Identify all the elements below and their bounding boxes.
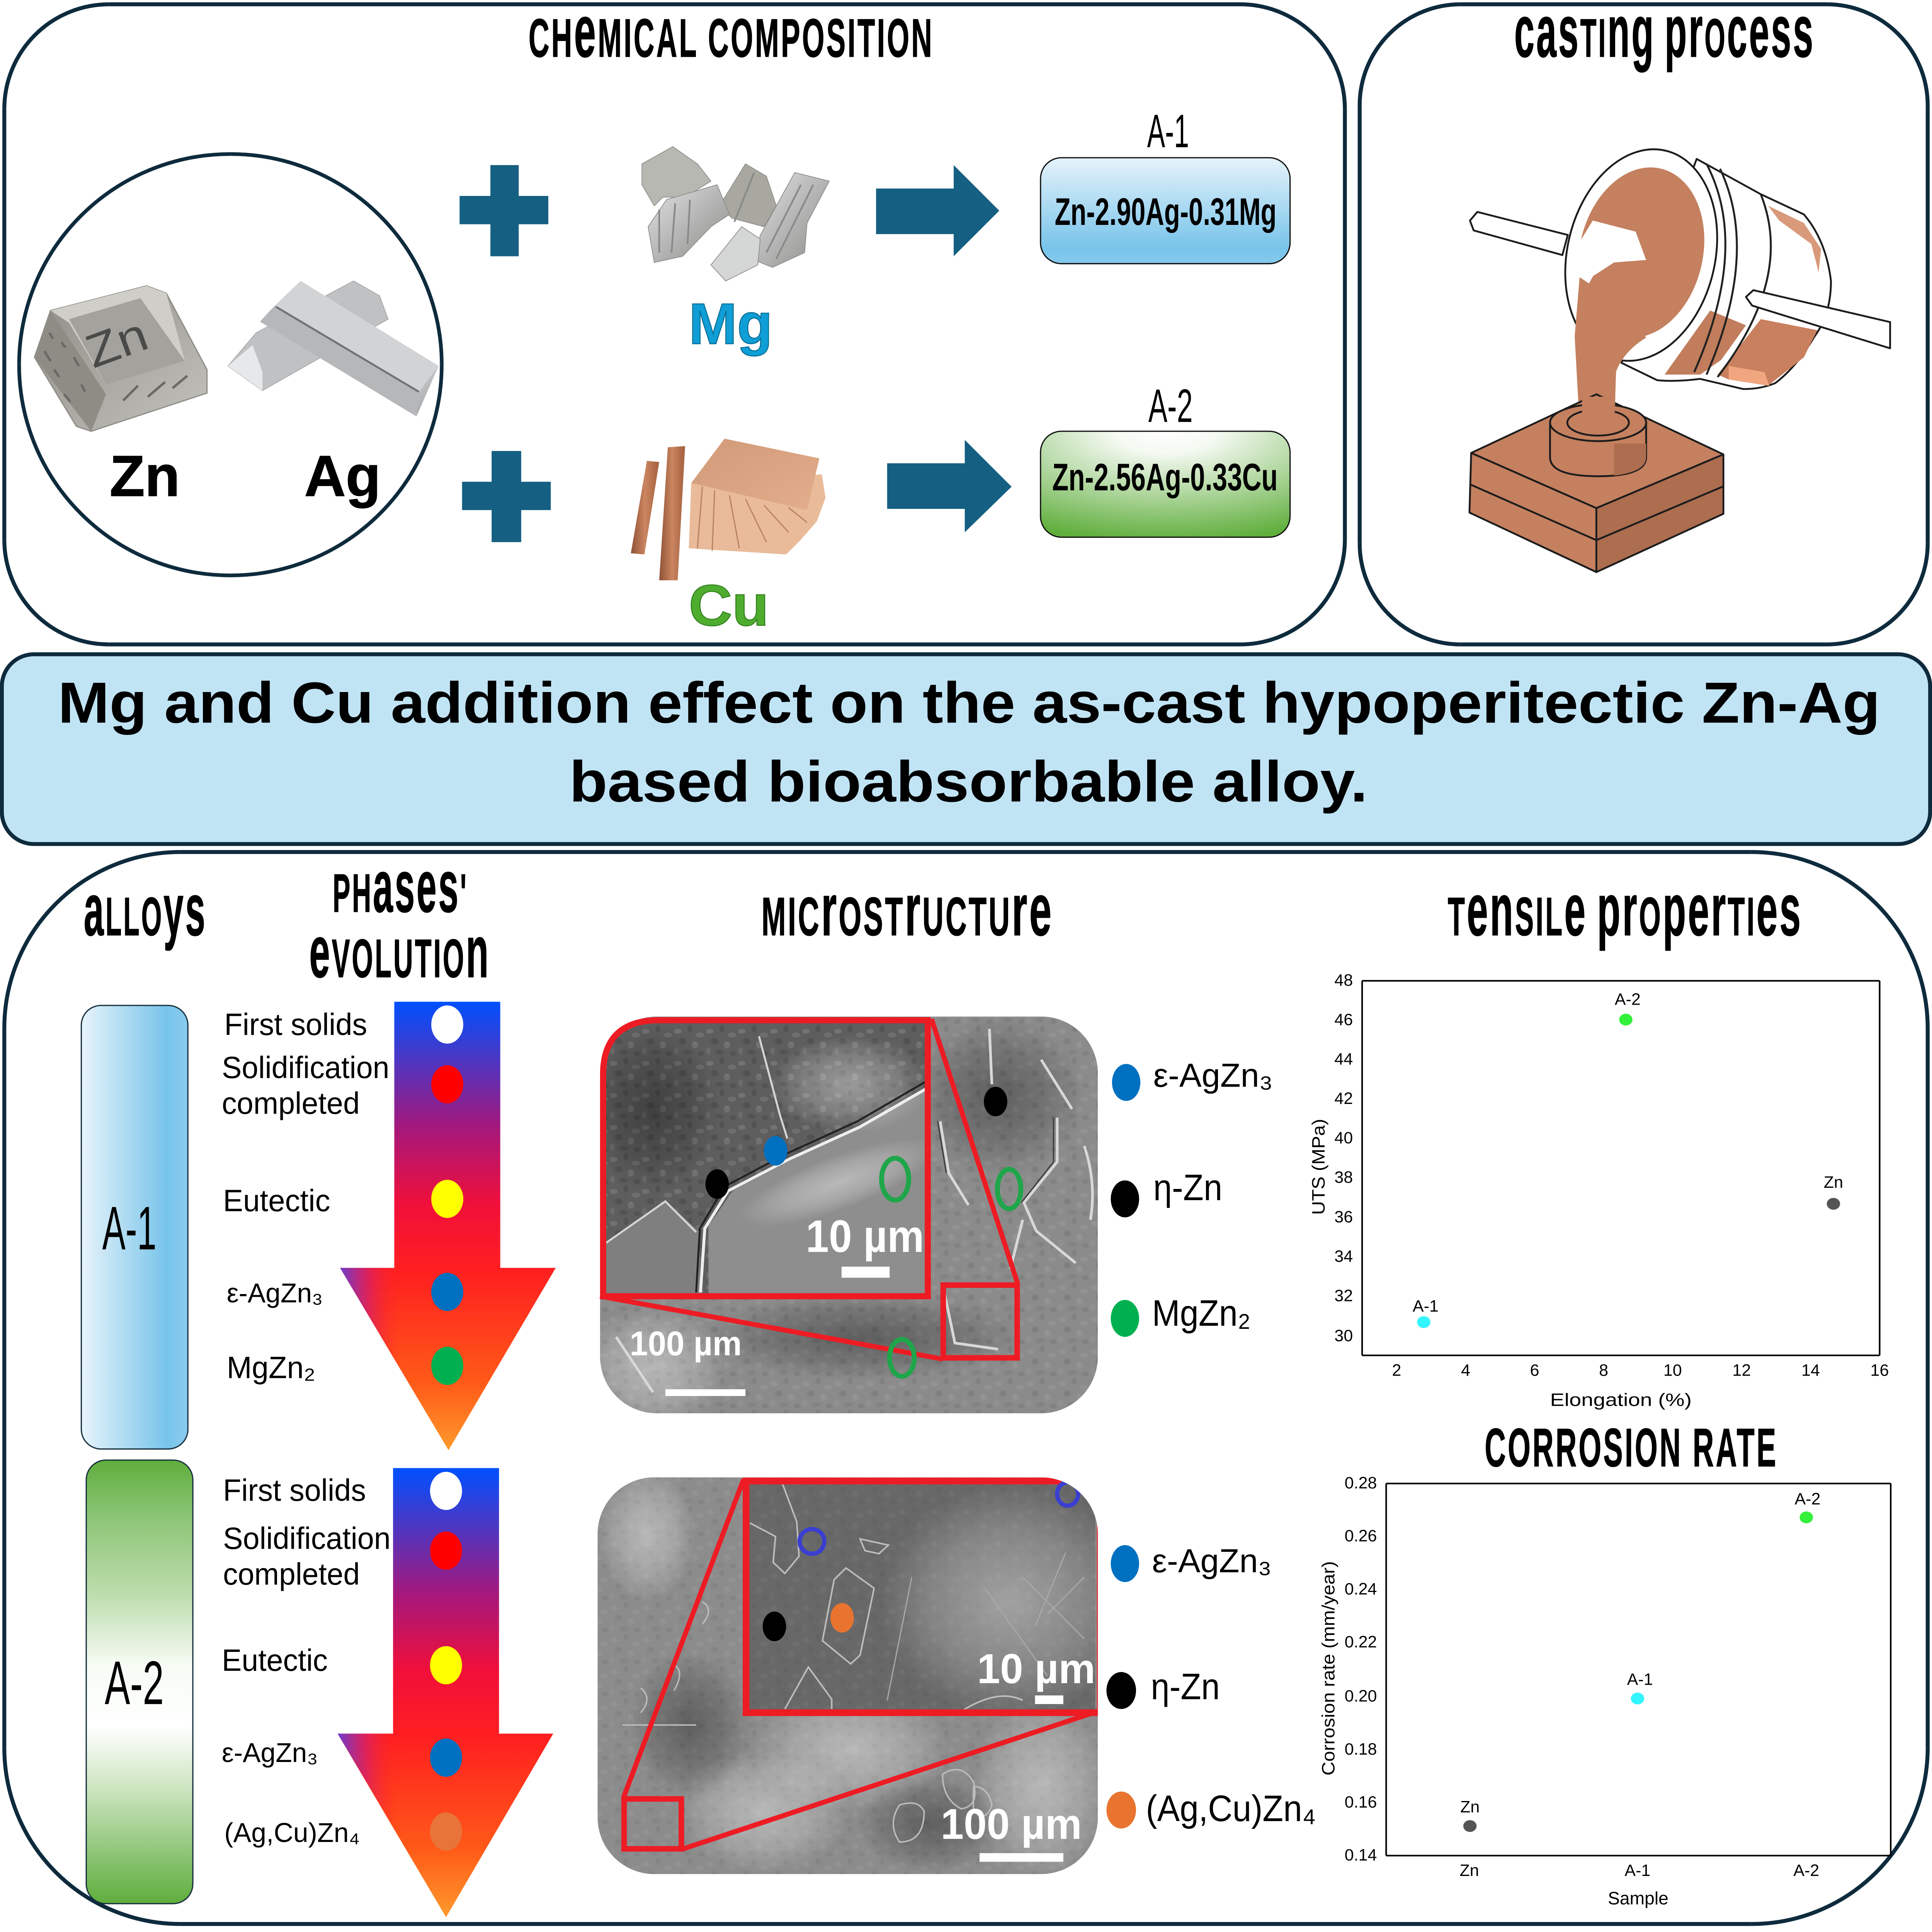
phase dots bbox=[431, 1005, 463, 1385]
box: Zn-2.56Ag-0.33Cu: Zn-2.56Ag-0.33Cu bbox=[1052, 456, 1278, 498]
y axis ticks: 36 bbox=[1334, 1208, 1353, 1226]
y axis label: UTS (MPa) bbox=[1308, 1119, 1328, 1215]
icon: crucible pouring into mould bbox=[1469, 134, 1890, 572]
x axis ticks: Zn bbox=[1460, 1861, 1479, 1880]
label: solidification completed A-1: Solidification bbox=[222, 1050, 389, 1085]
y axis ticks: 34 bbox=[1334, 1247, 1353, 1265]
left handle bbox=[1470, 212, 1568, 255]
chart: corrosion rate scatter bbox=[1318, 1474, 1891, 1908]
x axis ticks: 10 bbox=[1663, 1361, 1682, 1379]
y axis ticks: 0.24 bbox=[1345, 1580, 1377, 1598]
y axis ticks: 0.18 bbox=[1345, 1740, 1377, 1759]
icon: plus Cu bbox=[462, 451, 551, 542]
inset markers bbox=[763, 1482, 1078, 1641]
y axis ticks: 44 bbox=[1334, 1050, 1353, 1068]
point A-2 bbox=[1794, 1490, 1820, 1523]
icon: Mg chunks bbox=[642, 146, 829, 281]
label: solidification completed A-2: Solidification bbox=[223, 1521, 391, 1555]
y axis ticks: 42 bbox=[1334, 1089, 1353, 1108]
x axis ticks: 4 bbox=[1461, 1361, 1470, 1379]
x axis label: Sample bbox=[1608, 1888, 1668, 1908]
label: A-2: A-2 bbox=[1148, 379, 1193, 432]
label: AgZn3 A-1: ε-AgZn₃ bbox=[227, 1278, 323, 1308]
label: solidification completed A-1: completed bbox=[222, 1086, 360, 1121]
sprue bbox=[1550, 422, 1646, 476]
title banner bbox=[2, 654, 1930, 844]
point Zn bbox=[1460, 1798, 1480, 1832]
label: (Ag,Cu)Zn4 phase: (Ag,Cu)Zn₄ bbox=[224, 1817, 360, 1848]
point Zn: Zn bbox=[1460, 1798, 1480, 1816]
label: first solids A-1: First solids bbox=[224, 1007, 367, 1042]
molten metal bbox=[1562, 155, 1721, 350]
legend A-1: MgZn₂ bbox=[1152, 1293, 1251, 1334]
label: MgZn2: MgZn₂ bbox=[227, 1350, 315, 1385]
label: eutectic A-2: Eutectic bbox=[222, 1643, 328, 1677]
heading: phases' evolution bbox=[309, 845, 490, 993]
legend A-2: ε-AgZn₃ bbox=[1152, 1543, 1272, 1580]
y axis label: Corrosion rate (mm/year) bbox=[1318, 1561, 1338, 1776]
legend A-2: (Ag,Cu)Zn₄ bbox=[1146, 1788, 1316, 1829]
alloy bar A-2: A-2 bbox=[105, 1648, 164, 1717]
phase arrow A-2 bbox=[338, 1468, 553, 1917]
point A-1 bbox=[1413, 1297, 1439, 1328]
scale bar 10 um: 10 µm bbox=[806, 1211, 924, 1262]
heading: phases' evolution: eVOLUTIOn bbox=[309, 910, 490, 993]
inset region bbox=[606, 1023, 925, 1293]
point A-1: A-1 bbox=[1413, 1297, 1439, 1315]
legend A-1: ε-AgZn₃ bbox=[1153, 1057, 1273, 1094]
y axis ticks: 0.22 bbox=[1345, 1633, 1377, 1651]
x axis ticks: 6 bbox=[1530, 1361, 1539, 1379]
x axis ticks: A-1 bbox=[1624, 1861, 1650, 1880]
legend A-1: η-Zn bbox=[1153, 1167, 1222, 1208]
arrow to A-1 bbox=[876, 165, 999, 256]
icon: Zn ingot bbox=[34, 286, 207, 431]
inset markers bbox=[706, 1087, 1021, 1376]
y axis ticks: 0.16 bbox=[1345, 1793, 1377, 1811]
x axis ticks: A-2 bbox=[1793, 1861, 1819, 1880]
y axis ticks: 0.28 bbox=[1345, 1474, 1377, 1492]
alloy bar A-1 bbox=[81, 1005, 188, 1449]
point Zn bbox=[1824, 1173, 1843, 1210]
scale bar 100 um bbox=[629, 1324, 745, 1396]
legend A-1 bbox=[1111, 1057, 1273, 1337]
x axis ticks: 14 bbox=[1801, 1361, 1820, 1379]
label: Cu: Cu bbox=[689, 573, 769, 638]
y axis ticks: 0.14 bbox=[1345, 1846, 1377, 1864]
label: solidification completed A-1 bbox=[222, 1050, 389, 1121]
chart: tensile properties scatter bbox=[1308, 971, 1889, 1410]
label: A-1: A-1 bbox=[1147, 105, 1189, 157]
label: Ag: Ag bbox=[304, 443, 381, 508]
mould bbox=[1471, 394, 1723, 508]
y axis ticks: 48 bbox=[1334, 971, 1353, 990]
x axis ticks: 16 bbox=[1871, 1361, 1889, 1379]
scale bar 10 um: 10 µm bbox=[977, 1645, 1095, 1692]
point A-1: A-1 bbox=[1627, 1670, 1653, 1689]
icon: Zn ingot: Zn bbox=[79, 308, 155, 378]
phase arrow A-1 bbox=[340, 1002, 556, 1450]
panel: casting process bbox=[1360, 0, 1928, 645]
y axis ticks: 32 bbox=[1334, 1286, 1353, 1305]
alloy bar A-1: A-1 bbox=[102, 1194, 156, 1262]
SEM micrograph A-2 bbox=[598, 1466, 1140, 1879]
scale bar 100 um: 100 µm bbox=[941, 1800, 1082, 1848]
callout lines bbox=[624, 1479, 1100, 1849]
point A-2: A-2 bbox=[1615, 990, 1641, 1009]
label: solidification completed A-2 bbox=[223, 1521, 391, 1591]
y axis ticks: 0.20 bbox=[1345, 1687, 1377, 1706]
scale bar 100 um: 100 µm bbox=[629, 1324, 742, 1363]
x axis ticks: 2 bbox=[1392, 1361, 1401, 1379]
point A-2 bbox=[1615, 990, 1641, 1026]
label: Mg: Mg bbox=[689, 291, 772, 356]
legend A-2 bbox=[1107, 1543, 1316, 1829]
crucible bands bbox=[1694, 164, 1771, 377]
heading: microstructure: MICrOSTrUCTUre bbox=[762, 868, 1053, 951]
arrow to A-2 bbox=[887, 440, 1012, 532]
SEM micrograph A-1 bbox=[579, 1017, 1098, 1429]
panel: results bbox=[4, 845, 1928, 1924]
label: AgZn3 A-2: ε-AgZn₃ bbox=[222, 1737, 318, 1768]
x axis label: Elongation (%) bbox=[1550, 1389, 1692, 1410]
y axis ticks bbox=[1345, 1474, 1377, 1864]
phase dots bbox=[430, 1472, 462, 1851]
icon: Cu rod and sheets bbox=[631, 439, 825, 580]
point A-1 bbox=[1627, 1670, 1653, 1704]
x axis ticks: 12 bbox=[1732, 1361, 1751, 1379]
point Zn: Zn bbox=[1824, 1173, 1843, 1192]
title line 2: based bioabsorbable alloy. bbox=[569, 749, 1368, 814]
y axis ticks bbox=[1334, 971, 1353, 1345]
heading: phases' evolution: PHases' bbox=[333, 845, 468, 928]
box: Zn-2.90Ag-0.31Mg: Zn-2.90Ag-0.31Mg bbox=[1055, 190, 1277, 233]
y axis ticks: 0.26 bbox=[1345, 1527, 1377, 1545]
title line 1: Mg and Cu addition effect on the as-cast hypoperitectic Zn-Ag bbox=[58, 670, 1880, 735]
label: eutectic A-1: Eutectic bbox=[223, 1184, 330, 1218]
label: solidification completed A-2: completed bbox=[223, 1557, 360, 1591]
alloy bar A-2 bbox=[86, 1460, 193, 1904]
x axis ticks: 8 bbox=[1599, 1361, 1608, 1379]
y axis ticks: 46 bbox=[1334, 1010, 1353, 1029]
crucible rim bbox=[1545, 134, 1737, 376]
y axis ticks: 38 bbox=[1334, 1168, 1353, 1187]
point A-2: A-2 bbox=[1794, 1490, 1820, 1508]
box: Zn-2.90Ag-0.31Mg bbox=[1041, 158, 1290, 264]
heading: tensile properties: TenSILe prOperTIes bbox=[1448, 868, 1803, 951]
x axis ticks bbox=[1460, 1861, 1819, 1880]
y axis ticks: 30 bbox=[1334, 1327, 1353, 1345]
box: Zn-2.56Ag-0.33Cu bbox=[1041, 431, 1290, 537]
heading: alloys: aLLOys bbox=[84, 868, 207, 951]
inset region bbox=[750, 1481, 1095, 1709]
label: Zn: Zn bbox=[110, 443, 180, 508]
icon: Ag bars bbox=[228, 281, 439, 417]
callout lines bbox=[600, 1019, 1018, 1359]
circle with Zn and Ag bbox=[19, 154, 442, 575]
legend A-2: η-Zn bbox=[1151, 1666, 1220, 1707]
label: first solids A-2: First solids bbox=[223, 1473, 366, 1507]
right handle bbox=[1746, 290, 1890, 348]
metal stream bbox=[1575, 277, 1646, 430]
crucible body bbox=[1621, 159, 1831, 389]
y axis ticks: 40 bbox=[1334, 1129, 1353, 1147]
panel: chemical composition bbox=[4, 0, 1345, 645]
x axis ticks bbox=[1392, 1361, 1889, 1379]
icon: plus Mg bbox=[459, 165, 548, 256]
